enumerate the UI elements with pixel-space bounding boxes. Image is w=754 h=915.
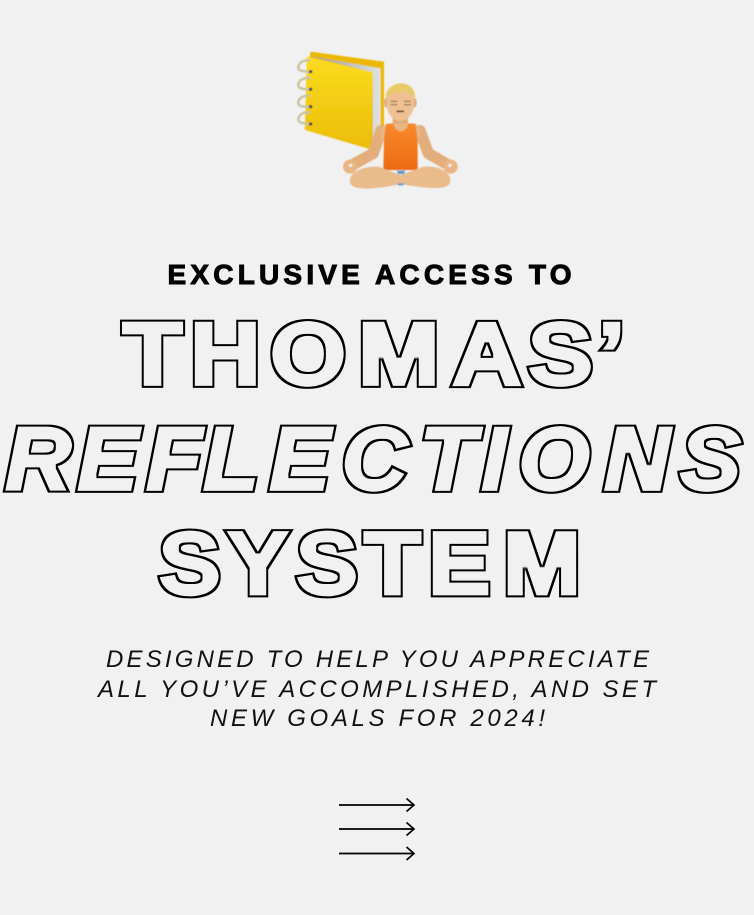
title line: System: SYSTEM — [159, 514, 581, 614]
icon: meditating person — [343, 83, 458, 189]
icon: yellow spiral notebook — [298, 52, 384, 150]
text block: subtitle — [96, 646, 658, 732]
arrows: three pointing right — [339, 798, 414, 860]
title: Thomas' Reflections System — [5, 304, 741, 614]
text block: subtitle: ALL YOU’VE ACCOMPLISHED, AND SET — [96, 676, 658, 703]
heading: exclusive access to: EXCLUSIVE ACCESS TO — [168, 259, 572, 290]
text block: subtitle: NEW GOALS FOR 2024! — [210, 705, 545, 732]
text block: subtitle: DESIGNED TO HELP YOU APPRECIATE — [106, 646, 650, 673]
title line: Reflections: REFLECTIONS — [5, 410, 741, 509]
title line: Thomas': THOMAS’ — [123, 304, 625, 404]
